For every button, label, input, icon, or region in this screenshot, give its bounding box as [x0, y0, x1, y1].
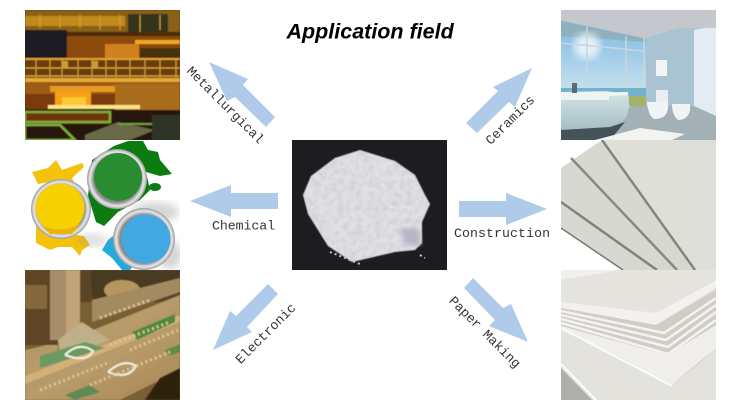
- arrow: electronic: [213, 284, 278, 350]
- arrow: paper making: [464, 278, 528, 342]
- label: metallurgical: Metallurgical: [183, 64, 267, 147]
- photo: bathroom: [561, 10, 716, 140]
- photo: white powder: [292, 140, 447, 270]
- green splash: [88, 141, 172, 226]
- blue splash: [102, 236, 132, 270]
- label: ceramics: Ceramics: [483, 93, 538, 148]
- powder pile: [303, 150, 430, 262]
- photo: construction boards: [561, 140, 716, 270]
- arrow: construction: [459, 193, 547, 225]
- photo: paint cans: [25, 140, 182, 270]
- arrow: chemical: [190, 185, 278, 217]
- shadows: [131, 202, 179, 222]
- yellow splash: [32, 160, 84, 184]
- photo: circuit boards: [25, 270, 180, 400]
- label: chemical: Chemical: [212, 218, 275, 234]
- yellow can: [31, 179, 91, 239]
- photo: paper stack: [561, 270, 716, 400]
- photo: metallurgical plant: [25, 10, 180, 140]
- arrow: ceramics: [466, 68, 532, 133]
- title: Application field: [286, 20, 455, 44]
- label: construction: Construction: [454, 226, 550, 241]
- arrow: metallurgical: [209, 62, 275, 127]
- green can: [87, 149, 147, 209]
- label: paper making: Paper Making: [446, 294, 523, 371]
- label: electronic: Electronic: [233, 301, 299, 367]
- blue can: [113, 208, 175, 270]
